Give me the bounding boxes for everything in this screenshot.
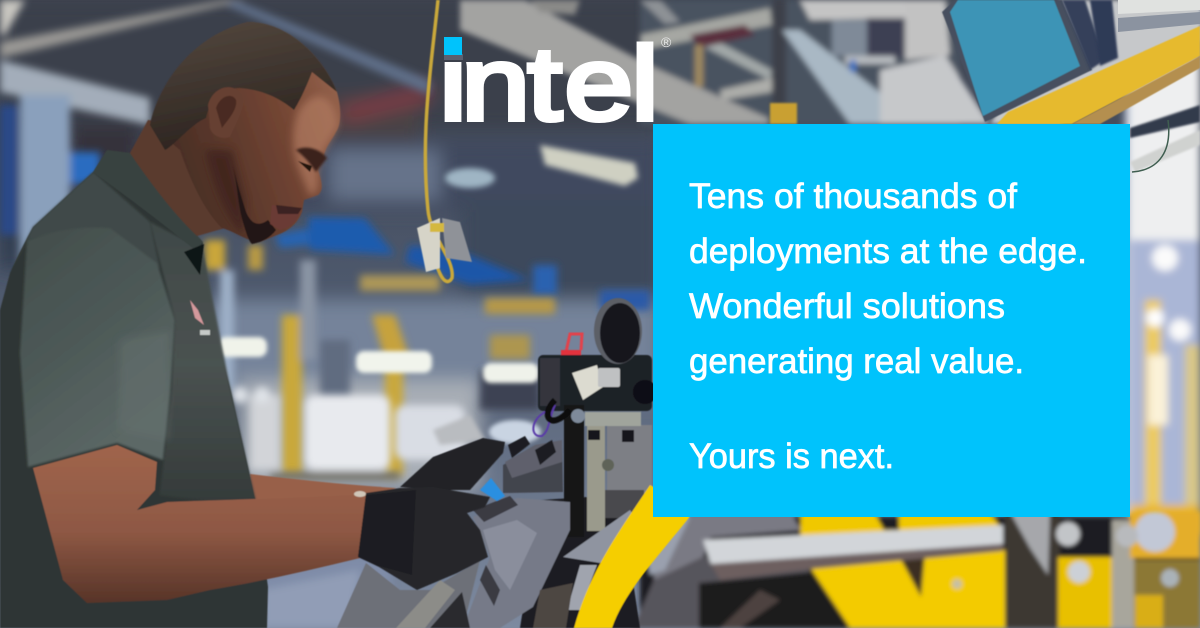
shirt bbox=[0, 150, 268, 628]
text block: headline message bbox=[689, 177, 1087, 476]
collar bbox=[93, 150, 203, 250]
text block: headline message: Tens of thousands of bbox=[689, 177, 1017, 216]
far forearm bbox=[250, 474, 396, 508]
near glove bbox=[358, 487, 490, 590]
column shaft bbox=[607, 425, 652, 495]
bracelet bbox=[354, 491, 366, 497]
light bar bbox=[703, 525, 1003, 564]
dark and metal parts to right bbox=[1005, 512, 1060, 628]
overhead: monitor, yellow beam, cables bbox=[942, 0, 1200, 172]
face highlights bbox=[293, 96, 338, 196]
hanging yellow cable and tag bbox=[417, 0, 472, 282]
text block: headline message: Wonderful solutions bbox=[689, 287, 1005, 326]
man bbox=[0, 22, 505, 628]
yellow blocks bbox=[800, 512, 1003, 545]
yellow shelf items and uprights bbox=[205, 240, 555, 475]
background dark gap behind grey body bbox=[520, 495, 640, 628]
blue shelves bbox=[275, 217, 650, 310]
near arm bbox=[33, 445, 368, 603]
grey housing bbox=[654, 517, 801, 580]
beams top-left bbox=[0, 0, 430, 280]
mid dark body bbox=[503, 445, 563, 493]
text block: headline message: Yours is next. bbox=[689, 437, 894, 476]
grey plastic body bbox=[463, 498, 570, 628]
panel: blue message box bbox=[653, 124, 1130, 517]
beard and goatee bbox=[233, 165, 276, 244]
flap bbox=[563, 510, 640, 563]
text block: headline message: generating real value. bbox=[689, 342, 1024, 381]
ear bbox=[208, 87, 243, 138]
white label bbox=[572, 365, 603, 400]
far glove bbox=[400, 438, 505, 490]
grey ceiling beams around logo and top-right bbox=[445, 0, 990, 188]
sleeve bbox=[20, 227, 175, 467]
red clip bbox=[566, 334, 582, 352]
icon: monitor bbox=[942, 0, 1092, 122]
lips bbox=[270, 205, 300, 230]
hair bbox=[150, 22, 337, 150]
icon: logo blue square bbox=[444, 37, 462, 55]
wires bbox=[533, 405, 555, 436]
neck bbox=[130, 120, 250, 236]
floor below arm bbox=[262, 555, 392, 628]
text block: headline message: deployments at the edge. bbox=[689, 232, 1087, 271]
intel logo: intel bbox=[439, 26, 659, 142]
head bbox=[150, 22, 340, 242]
dark assembly on the right of the man bbox=[337, 298, 695, 628]
registered mark: ® bbox=[661, 34, 672, 50]
yoke bbox=[10, 172, 160, 273]
blue connector bbox=[480, 478, 505, 501]
logo on shirt bbox=[190, 300, 204, 325]
right edge strip bbox=[1125, 0, 1200, 535]
ceiling and far structure bbox=[0, 0, 660, 490]
eye and brow bbox=[296, 148, 327, 172]
black housing bbox=[538, 355, 652, 411]
chest bbox=[150, 222, 257, 507]
jaw shadow bbox=[205, 150, 245, 235]
bottom machine: yellow and grey parts bbox=[633, 512, 1200, 628]
yellow beam bbox=[997, 26, 1200, 124]
curved yellow arm bbox=[574, 485, 695, 628]
white machine blobs and light bars bbox=[232, 370, 540, 480]
